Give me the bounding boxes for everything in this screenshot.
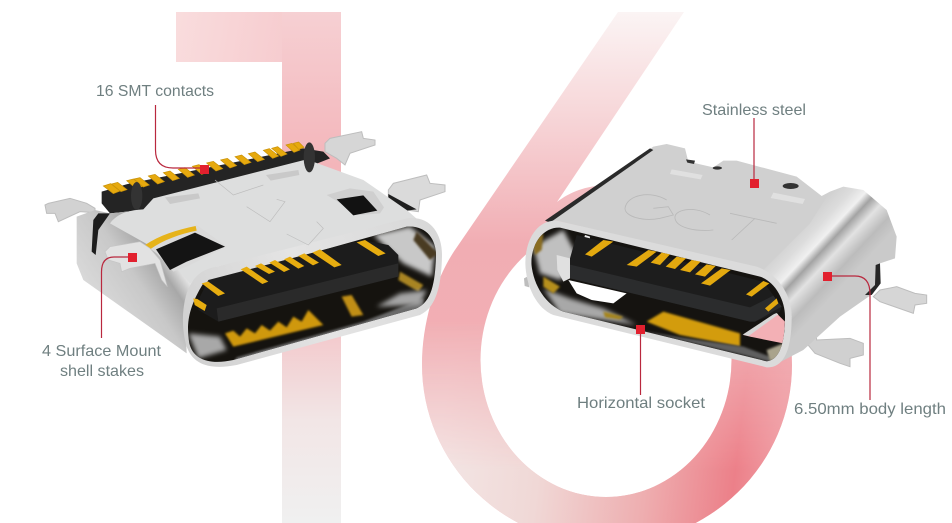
connector: right view with GCT logo	[524, 144, 927, 367]
connector: left view with SMT contacts	[45, 132, 445, 367]
top plate	[110, 159, 420, 283]
tongue contacts	[585, 240, 778, 312]
plate notches	[686, 159, 799, 189]
plate stamps	[165, 170, 299, 204]
black housing	[102, 148, 330, 213]
callout: 16 SMT contacts: 16 SMT contacts	[96, 83, 214, 100]
right cut-out dark	[337, 195, 377, 215]
callout: 6.50mm body length	[794, 272, 946, 418]
right foot shadow	[388, 194, 417, 211]
foot front	[807, 318, 863, 367]
callout: Stainless steel	[702, 102, 806, 188]
corner reflection	[767, 343, 783, 362]
lower contacts	[647, 312, 740, 347]
engraved outlines	[215, 180, 323, 245]
callout: 6.50mm body length: 6.50mm body length	[794, 401, 946, 418]
callout: 4 Surface Mount shell stakes: 4 Surface Mount	[42, 343, 162, 360]
side wall	[77, 200, 213, 353]
callout: Horizontal socket: Horizontal socket	[577, 395, 706, 412]
side wall slit	[92, 213, 110, 255]
inner metal reflections	[533, 230, 580, 280]
contact row	[103, 142, 304, 194]
socket interior	[188, 226, 436, 362]
upper inner post	[584, 235, 590, 238]
black plate edge	[545, 148, 653, 223]
tongue	[570, 235, 782, 322]
callout: 16 SMT contacts	[96, 83, 214, 174]
tongue front face	[570, 265, 782, 322]
top plate	[547, 144, 830, 270]
tab left	[524, 277, 529, 287]
side wall	[757, 187, 897, 367]
right foot	[388, 175, 445, 212]
small lower contact	[603, 312, 623, 319]
background numeral 6	[422, 12, 792, 523]
solder post right	[304, 142, 315, 172]
foot rear	[873, 287, 927, 313]
inner metal reflections	[188, 333, 227, 358]
rear slit	[865, 263, 881, 295]
engraved GCT logo	[625, 195, 777, 240]
pink see-through	[743, 313, 785, 343]
plate stamps	[670, 169, 805, 204]
left cut-out rim	[145, 225, 227, 272]
pink window edge	[743, 313, 778, 336]
tongue	[198, 240, 398, 322]
socket outer shell	[183, 218, 442, 367]
callout: Stainless steel: Stainless steel	[702, 102, 806, 119]
callout: 4 Surface Mount shell stakes: shell stakes	[60, 363, 144, 380]
rear foot	[325, 132, 375, 165]
white see-through hole	[568, 280, 627, 303]
lower contacts	[225, 310, 323, 347]
lower contact small	[342, 295, 363, 317]
background numeral 1	[176, 12, 341, 523]
tongue front face	[217, 263, 398, 322]
inner flap	[557, 255, 570, 282]
callout: Horizontal socket	[577, 325, 706, 412]
front-left stake	[105, 242, 167, 287]
callout: 4 Surface Mount shell stakes	[42, 253, 162, 380]
right cut-out rim	[327, 188, 384, 215]
solder post left	[131, 182, 142, 210]
left cut-out yellow strip	[145, 226, 197, 249]
bottom strip	[640, 331, 770, 362]
tongue contacts	[193, 240, 386, 311]
socket outer shell	[525, 221, 792, 367]
socket interior	[531, 228, 785, 362]
left foot	[45, 198, 95, 222]
left cut-out dark	[156, 233, 225, 270]
